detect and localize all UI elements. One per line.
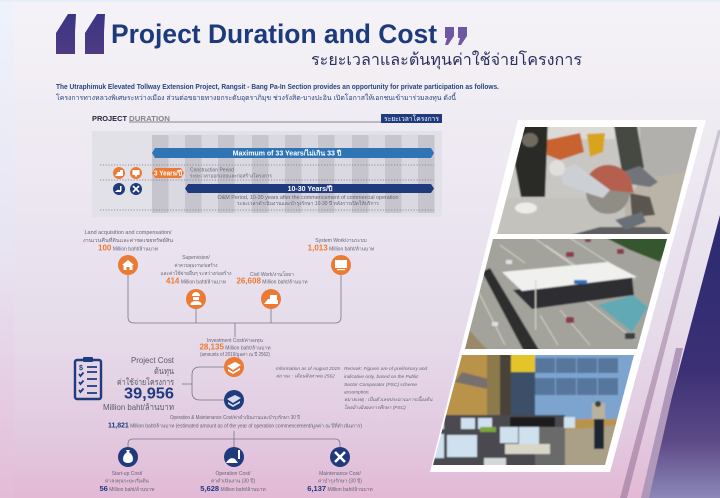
- remark note: Remark: Figures are of preliminary and: [344, 366, 428, 372]
- cost item: maintenance: ค่าบำรุงรักษา (30 ปี): [318, 478, 362, 484]
- information date note: [276, 366, 340, 380]
- remark note: หมายเหตุ : เป็นตัวเลขประมาณการเบื้องต้น: [344, 395, 433, 403]
- remark note: assumption.: [344, 390, 370, 396]
- cost item: start-up: 56 Million baht/ล้านบาท: [100, 484, 154, 493]
- title: Project Duration and Cost: [111, 19, 437, 49]
- cost item: supervision: และค่าใช้จ่ายอื่นๆ ระหว่างก่อสร้าง: [160, 270, 232, 277]
- section heading: project duration: DURATION: [129, 114, 170, 123]
- text: construction period: [190, 168, 272, 180]
- cost item: civil work: Civil Work/งานโยธา: [250, 271, 294, 278]
- text: O&M period: O&M Period, 10-30 years after the commencement of commercial operation: [218, 195, 399, 201]
- cost item: maintenance: [307, 447, 373, 493]
- remark note: indicative only, based on the Public: [344, 374, 419, 380]
- icon: construction: [113, 167, 125, 179]
- icon: operation: [113, 183, 125, 195]
- operation and maintenance cost: Operation & Maintenance Cost/ค่าดำเนินงานและบำรุงรักษา 30 ปี: [170, 414, 300, 421]
- icon: house: [118, 255, 138, 275]
- operation and maintenance cost: 11,821 Million baht/ล้านบาท (estimated amount as of the year of operation commencement/มูลค่า ณ ปีที่ดำเนินการ): [108, 422, 362, 430]
- cost item: start-up: Start-up Cost/: [112, 471, 143, 477]
- icon: shovel: [224, 447, 244, 467]
- cost item: system work: 1,013 Million baht/ล้านบาท: [308, 244, 374, 252]
- cost item: supervision: Supervision/: [182, 255, 210, 261]
- icon: clipboard: [75, 357, 101, 399]
- section heading: project duration: PROJECT: [92, 114, 127, 123]
- cost item: system work: System Work/งานระบบ: [315, 238, 367, 244]
- investment cost: [199, 338, 271, 377]
- cost item: land acquisition: งานเวนคืนที่ดินและค่าชดเชยทรัพย์สิน: [83, 237, 174, 244]
- remark note: [344, 366, 433, 411]
- subtitle in Thai: ระยะเวลาและต้นทุนค่าใช้จ่ายโครงการ: [311, 50, 582, 70]
- text: construction period: Construction Period: [190, 168, 234, 174]
- project cost total: ต้นทุน: [154, 366, 174, 377]
- information date note: สถานะ : เดือนสิงหาคม 2562: [276, 372, 335, 380]
- icon: clipboard: $: [79, 365, 83, 372]
- bar: construction 3 years: [152, 168, 184, 178]
- cost item: start-up: [100, 447, 154, 493]
- decorative corner band: navy: [620, 130, 720, 498]
- icon: closing quote mark: [445, 27, 467, 45]
- cost item: civil work: [236, 271, 308, 309]
- bar: maximum 33 years: Maximum of 33 Years/ไม่เกิน 33 ปี: [233, 148, 342, 158]
- cost item: civil work: 26,608 Million baht/ล้านบาท: [236, 276, 308, 286]
- section heading: project duration: ระยะเวลาโครงการ: [384, 114, 439, 123]
- icon: system: [130, 167, 142, 179]
- icon: worker: [186, 289, 206, 309]
- text: construction period: ระยะเวลาออกแบบและก่อสร้างโครงการ: [190, 172, 272, 180]
- cost item: supervision: ค่าควบคุมงานก่อสร้าง: [174, 262, 218, 269]
- intro text: [56, 84, 499, 102]
- bar: maximum 33 years: [152, 148, 434, 158]
- cost item: maintenance: Maintenance Cost/: [319, 471, 361, 477]
- icon: money orange: [224, 357, 244, 377]
- remark note: โดยอ้างอิงผลการศึกษา (PSC): [344, 404, 406, 411]
- project cost total: Project Cost: [131, 355, 175, 365]
- icon: monitor: [331, 255, 351, 275]
- remark note: Sector Comparator (PSC) scheme: [344, 382, 417, 388]
- icon: money bag: [118, 447, 138, 467]
- project cost total: 39,956: [124, 386, 174, 402]
- operation and maintenance cost: [108, 414, 362, 430]
- intro text: โครงการทางหลวงพิเศษระหว่างเมือง ส่วนต่อขยายทางยกระดับอุตราภิมุข ช่วงรังสิต-บางปะอิน เปิดโอกาสให้เอกชนเข้ามาร่วมลงทุน ดังนี้: [56, 91, 457, 102]
- investment cost: (amounts of 2019/มูลค่า ณ ปี 2562): [200, 351, 270, 358]
- information date note: Information as of August 2019: [276, 366, 340, 372]
- cost item: maintenance: 6,137 Million baht/ล้านบาท: [307, 484, 373, 493]
- icon: maintenance: [130, 183, 142, 195]
- cost item: land acquisition: Land acquisition and compensation/: [84, 230, 172, 236]
- cost item: operation: [200, 447, 266, 493]
- project cost total: [103, 355, 175, 412]
- cost item: start-up: ค่าลงทุนระยะเริ่มต้น: [105, 478, 149, 484]
- icon: opening quote mark: [56, 14, 105, 54]
- cost item: land acquisition: [83, 230, 174, 275]
- text: O&M period: ระยะเวลาดำเนินงานและบำรุงรักษา 10-30 ปี หลังการเปิดให้บริการ: [237, 200, 379, 207]
- bar: operation 10-30 years: 10-30 Years/ปี: [288, 185, 333, 193]
- cost item: supervision: 414 Million baht/ล้านบาท: [166, 276, 226, 286]
- section heading: project duration: [92, 114, 442, 123]
- bar: construction 3 years: 3 Years/ปี: [154, 170, 182, 178]
- investment cost: 28,135 Million baht/ล้านบาท: [199, 342, 271, 352]
- icon: money navy: [224, 390, 244, 410]
- bar: operation 10-30 years: [185, 184, 434, 193]
- investment connector lines: [128, 275, 341, 447]
- photo: control room: [433, 355, 634, 465]
- photo frame: [425, 120, 706, 472]
- text: O&M period: [218, 195, 399, 207]
- cost item: land acquisition: 100 Million baht/ล้านบาท: [98, 244, 158, 252]
- cost item: operation: 5,628 Million baht/ล้านบาท: [200, 484, 266, 493]
- photo: toll plaza: [465, 239, 667, 349]
- panel: duration timeline: [92, 131, 442, 217]
- icon: bulldozer: [261, 289, 281, 309]
- cost item: system work: [308, 238, 374, 275]
- investment cost: Investment Cost/ค่าลงทุน: [207, 338, 264, 344]
- project cost total: Million baht/ล้านบาท: [103, 402, 174, 412]
- cost item: supervision: [160, 255, 232, 309]
- cost item: operation: ค่าดำเนินงาน (30 ปี): [211, 478, 255, 484]
- photo: concrete cutting: [497, 127, 697, 234]
- icon: tools: [330, 447, 350, 467]
- cost item: operation: Operation Cost/: [215, 471, 251, 477]
- intro text: The Utraphimuk Elevated Tollway Extension Project, Rangsit - Bang Pa-In Section provides an opportunity for private participation as follows.: [56, 84, 499, 91]
- project cost total: ค่าใช้จ่ายโครงการ: [117, 377, 174, 387]
